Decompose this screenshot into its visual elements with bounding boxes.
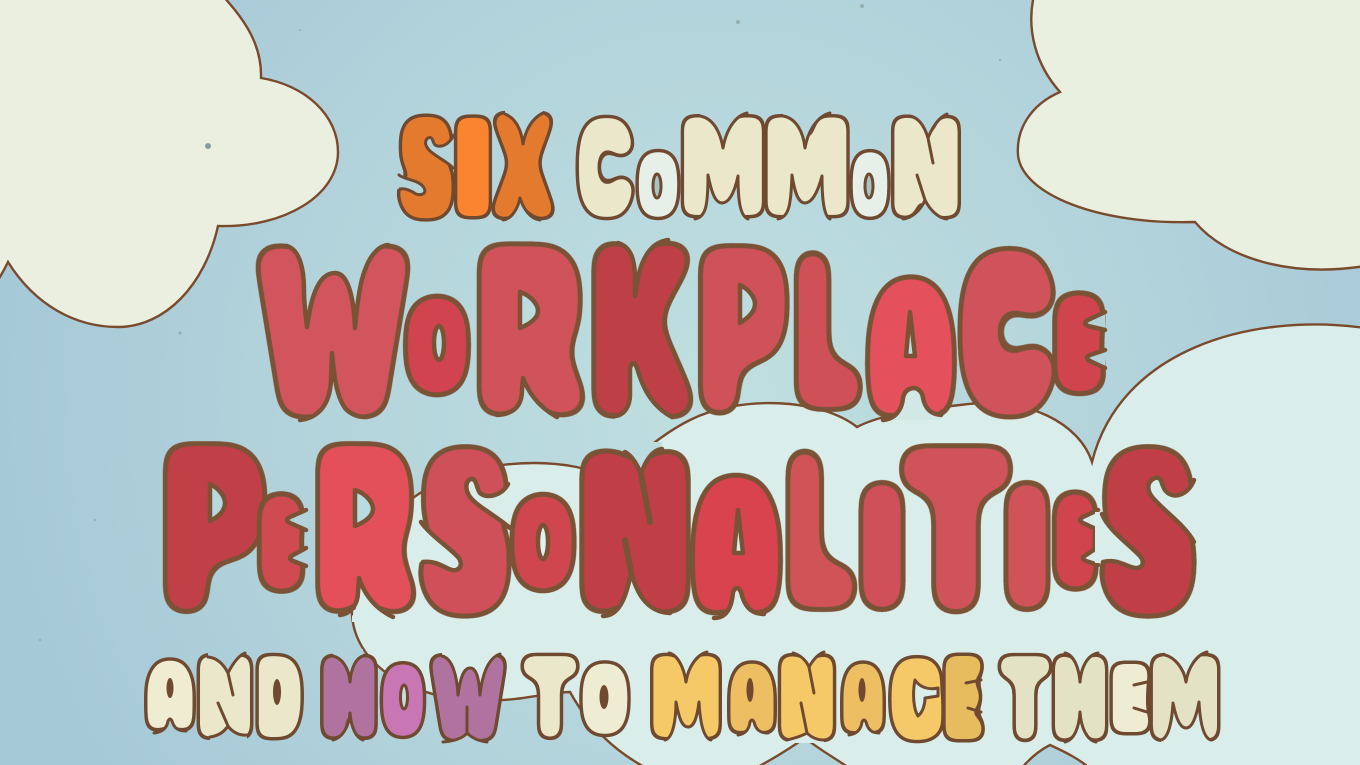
title: personalities: R: [320, 409, 408, 646]
title: personalities: o: [520, 455, 566, 609]
letter counters: six common: [647, 166, 878, 206]
cloud: top right: [1018, 0, 1360, 269]
title: workplace: [268, 206, 1105, 453]
letter notches: personalities: [340, 442, 764, 622]
letter notches: and how to manage them: [154, 646, 1211, 750]
title: workplace: C: [966, 217, 1048, 448]
title: personalities: S: [427, 416, 503, 648]
title: workplace: R: [482, 208, 576, 450]
title: personalities: P: [168, 409, 258, 646]
title: and how to manage them: H: [1054, 637, 1106, 759]
title: and how to manage them: D: [259, 638, 299, 756]
title: and how to manage them: H: [323, 639, 375, 756]
title: and how to manage them: G: [893, 642, 941, 758]
title: personalities: I: [865, 460, 899, 632]
title: six common: C: [580, 97, 630, 240]
title: six common: o: [640, 119, 676, 235]
title: workplace: E: [1060, 275, 1098, 413]
letter counters: and how to manage them: [166, 674, 1147, 716]
title: and how to manage them: M: [652, 638, 720, 756]
title: six common: X: [497, 89, 549, 243]
title: workplace: L: [800, 219, 854, 440]
title: personalities: E: [1060, 472, 1090, 608]
title: and how to manage them: E: [1114, 650, 1146, 747]
letter notches: workplace: [287, 233, 1105, 428]
title: and how to manage them: O: [584, 649, 626, 748]
title: six common: M: [682, 93, 764, 239]
title: and how to manage them: [150, 637, 1218, 759]
title: and how to manage them: N: [200, 638, 250, 756]
title: workplace: W: [268, 210, 398, 452]
title: and how to manage them: W: [436, 637, 500, 759]
title: and how to manage them: A: [846, 650, 880, 747]
title: personalities: [168, 409, 1205, 648]
title: and how to manage them: A: [151, 647, 189, 744]
title: and how to manage them: T: [527, 638, 573, 756]
title: workplace: P: [704, 211, 780, 448]
title: and how to manage them: N: [780, 637, 834, 759]
letter counters: workplace: [425, 277, 915, 369]
title: and how to manage them: M: [1152, 637, 1218, 759]
letter counters: personalities: [200, 474, 743, 568]
title: workplace: o: [413, 255, 461, 414]
title: six common: o: [854, 119, 886, 235]
title: six common: S: [402, 94, 450, 241]
title: personalities: L: [792, 418, 848, 641]
speckle on left cloud: [205, 143, 211, 149]
title: and how to manage them: A: [734, 650, 770, 747]
title: and how to manage them: O: [385, 651, 421, 751]
title: six common: N: [892, 93, 960, 240]
letter notches: six common: [503, 106, 947, 227]
title: and how to manage them: T: [1004, 637, 1046, 759]
title: personalities: E: [264, 474, 298, 610]
title: personalities: I: [1010, 460, 1044, 632]
title: six common: [394, 89, 960, 243]
title: personalities: A: [704, 450, 768, 639]
title: workplace: K: [596, 206, 684, 453]
title: personalities: T: [911, 413, 1001, 646]
title: and how to manage them: E: [946, 637, 980, 759]
title: personalities: S: [1108, 416, 1188, 648]
cloud: top left: [0, 0, 338, 327]
title: personalities: N: [584, 418, 686, 644]
cloud: lower centre and right: [352, 325, 1360, 765]
title: workplace: A: [880, 251, 942, 443]
title: six common: I: [453, 93, 493, 240]
title: six common: M: [766, 93, 848, 239]
